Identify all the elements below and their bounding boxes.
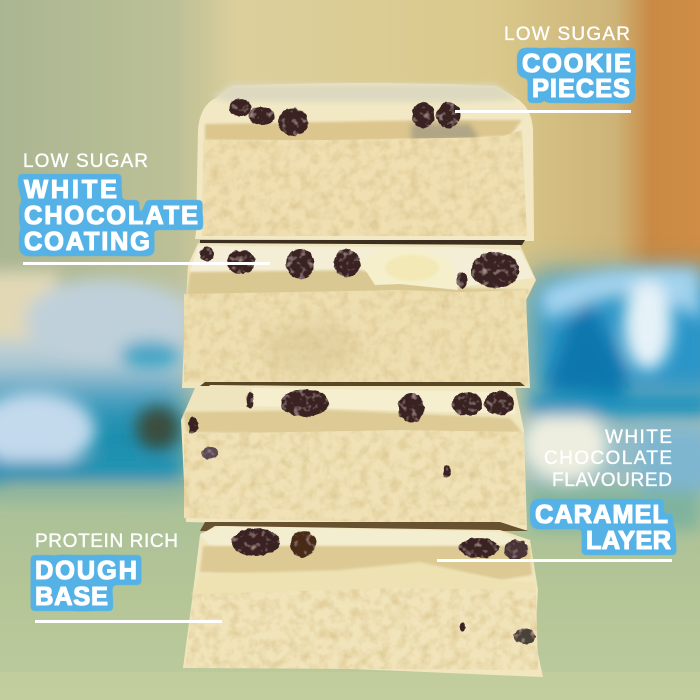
highlighted title: white chocolate coating: [24, 176, 198, 256]
highlighted title: caramel layer: [535, 501, 671, 555]
cookie pieces: [188, 99, 536, 644]
label: low sugar: LOW SUGAR: [504, 24, 630, 45]
label: low sugar: LOW SUGAR: [23, 151, 148, 172]
label: white chocolate flavoured: WHITE: [605, 427, 672, 448]
leader line: [35, 620, 222, 623]
highlighted title: dough base: BASE: [35, 583, 108, 611]
highlighted title: caramel layer: LAYER: [586, 527, 671, 555]
leader line: [23, 262, 270, 265]
highlighted title: cookie pieces: [522, 50, 631, 103]
dark gap between bars 3 and 4: [200, 522, 528, 531]
bar 2: [182, 243, 536, 388]
highlighted title: white chocolate coating: WHITE: [24, 176, 117, 204]
callout: white chocolate coating: [23, 151, 270, 265]
label: white chocolate flavoured: [544, 427, 672, 491]
highlighted title: cookie pieces: PIECES: [532, 75, 630, 103]
leader line: [455, 110, 631, 113]
callout: caramel layer: [437, 427, 672, 562]
callout: cookie pieces: [455, 24, 631, 113]
label: white chocolate flavoured: CHOCOLATE: [544, 448, 672, 469]
highlighted title: dough base: DOUGH: [35, 557, 137, 585]
callout: dough base: [35, 531, 222, 623]
leader line: [437, 559, 672, 562]
stacked protein bars: [181, 83, 543, 677]
dark gap between bars 2 and 3: [200, 382, 525, 386]
bar 1: [195, 83, 534, 241]
highlighted title: caramel layer: CARAMEL: [535, 501, 668, 529]
highlighted title: white chocolate coating: CHOCOLATE: [24, 202, 198, 230]
highlighted title: white chocolate coating: COATING: [24, 228, 150, 256]
label: white chocolate flavoured: FLAVOURED: [552, 470, 672, 491]
bar 4: [183, 526, 543, 677]
highlighted title: dough base: [35, 557, 137, 611]
highlighted title: cookie pieces: COOKIE: [522, 50, 631, 78]
label: protein rich: PROTEIN RICH: [35, 531, 178, 552]
bar 3: [181, 385, 527, 530]
dark gap between bars 1 and 2: [200, 240, 525, 245]
white chocolate chunk: [360, 249, 458, 290]
